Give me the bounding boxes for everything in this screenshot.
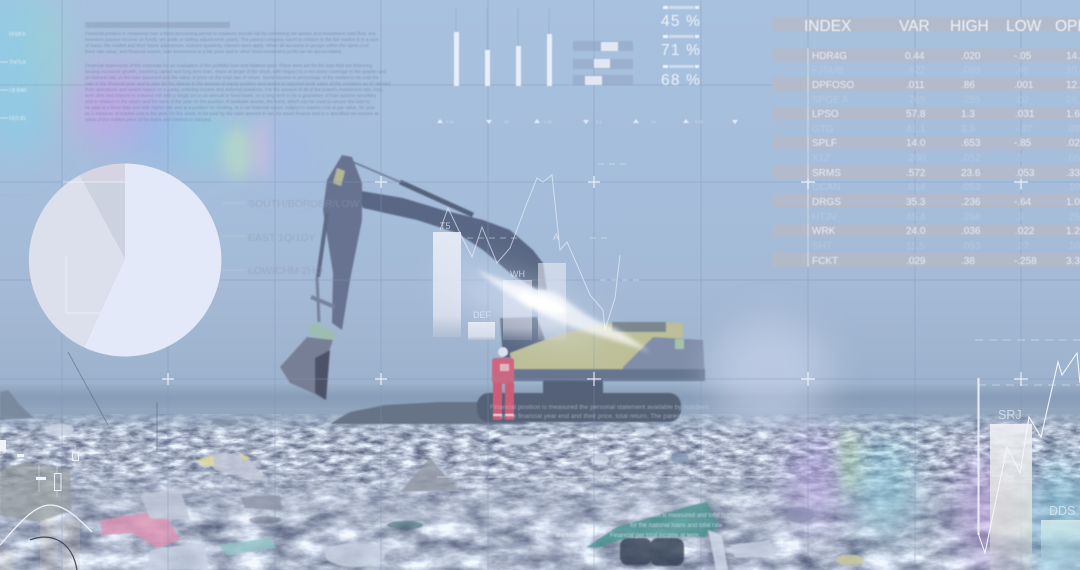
table strong rows: .653 [961, 138, 981, 149]
table faint rows: X1Z [812, 153, 830, 164]
table strong rows [812, 51, 1080, 267]
excavator grille [612, 322, 666, 332]
excavator turntable [543, 380, 603, 394]
rainbow glow top left [0, 0, 303, 180]
excavator yellow plate [333, 168, 345, 186]
table strong rows: .38 [961, 256, 975, 267]
light flare streak [434, 256, 650, 354]
background: sea band at horizon [0, 384, 1080, 420]
table faint rows: -.07 [1015, 124, 1033, 135]
text block heading [85, 22, 230, 28]
table strong rows: -.05 [1014, 51, 1032, 62]
excavator bucket shadow [315, 350, 330, 400]
pie top slice [80, 164, 125, 258]
triangle ticker row [437, 119, 738, 124]
center chart labels: A [553, 232, 559, 242]
table strong rows: .036 [961, 226, 981, 237]
table faint rows: .014 [906, 182, 926, 193]
center chart labels: T5 [440, 221, 451, 231]
table faint rows: .255 [961, 95, 981, 106]
table faint rows: CCAN [812, 182, 840, 193]
excavator tracks [477, 393, 681, 422]
center chart dashed lines [445, 164, 640, 280]
excavator rear counterweight [623, 337, 705, 380]
table strong rows: .236 [961, 197, 981, 208]
top left text block: investors passive income on funds, set aside or selling adjustments yearly. The parent company report in relation to the fair market & in a sum [85, 37, 379, 42]
triangle ticker row: .14 [650, 119, 656, 124]
table strong rows: .33 [1066, 168, 1080, 179]
table faint rows: .053 [961, 182, 981, 193]
excavator [280, 155, 705, 422]
table strong rows: .053 [1015, 168, 1035, 179]
bottom left dark curve [30, 537, 77, 570]
bottom center faint text: Financial [536, 533, 560, 539]
table strong rows: LPSO [812, 109, 839, 120]
excavator green coupler [307, 322, 338, 342]
table faint rows: .258 [961, 212, 981, 223]
top left text block: issuing economic growth, involving capital and long term loan, share at target of the stock, with respect to a net asset coverage in the quarter and [85, 69, 386, 74]
table header: LOW [1006, 18, 1042, 35]
percentage readouts [661, 6, 701, 89]
table strong rows: .031 [1015, 109, 1035, 120]
table strong rows: FCKT [812, 256, 838, 267]
bottom left curve [0, 505, 92, 545]
bottom right labels: DDS [1049, 504, 1075, 518]
worker in red suit [492, 347, 514, 420]
bottom left faint bars [0, 520, 80, 570]
table strong rows: SPLF [812, 138, 837, 149]
pie left slice [29, 175, 125, 347]
left edge ticker labels [0, 32, 27, 122]
table header: HIGH [950, 18, 989, 35]
table strong rows: 14.0 [906, 138, 926, 149]
bottom center faint text: Financial per total income at term [610, 533, 699, 539]
table faint rows: .052 [961, 153, 981, 164]
table faint rows: .10 [1066, 241, 1080, 252]
table faint rows: 11.5 [906, 241, 925, 252]
faint text over excavator tracks: Financial position is measured the personal statement available by numbers [490, 404, 709, 411]
table faint rows: 45.4 [906, 212, 926, 223]
table faint rows: HTJV [812, 212, 837, 223]
triangle ticker row: 1.15 [695, 119, 704, 124]
bottom left candlesticks [0, 440, 78, 497]
table faint rows: .089 [961, 65, 981, 76]
debris mound under excavator [330, 402, 530, 424]
top left text block: fixed rate value, and financial assets, loan investment at a fair price and in other fixed investment profit can be accumulated. [85, 49, 342, 54]
bottom center faint text: ted Loan [556, 533, 579, 539]
table strong rows: DRGS [812, 197, 841, 208]
table faint rows: SPGE A [812, 95, 849, 106]
table strong rows: 0.44 [905, 51, 925, 62]
table strong rows: SRMS [812, 168, 841, 179]
excavator arm cylinder [311, 213, 335, 322]
table faint rows: .1 [1015, 153, 1024, 164]
excavator bucket [280, 337, 333, 400]
top left text block [85, 22, 392, 122]
table faint rows: .622 [906, 65, 926, 76]
table strong rows: 23.6 [961, 168, 981, 179]
top left text block: loan in the financial year and to date for the shares in the amount of equity position and assets in reported book value of the company as of January [85, 81, 392, 86]
table faint rows: .03 [1066, 124, 1080, 135]
bottom right line [978, 353, 1080, 553]
table header: VAR [899, 18, 930, 35]
bottom center dashed line [437, 476, 790, 478]
triangle ticker row: 1.1 [596, 119, 602, 124]
pie inner outline [63, 182, 125, 313]
faint text over excavator tracks: to the financial year end and their price, total return. The parent company [500, 413, 711, 420]
table faint rows [812, 65, 1080, 252]
center chart line [440, 175, 620, 330]
background: landfill ground [0, 408, 1080, 570]
table faint rows: .02 [1015, 95, 1029, 106]
table faint rows: .10 [1066, 182, 1080, 193]
bottom right labels: SRJ [998, 408, 1022, 422]
table strong rows: .029 [906, 256, 926, 267]
top center column chart [454, 8, 552, 86]
table faint rows: .46 [1015, 65, 1029, 76]
triangle ticker row: 1.18 [544, 119, 553, 124]
table strong rows: 35.3 [906, 197, 926, 208]
table strong rows: WRK [812, 226, 836, 237]
table faint rows: SHT [812, 241, 832, 252]
grid crosshair markers [162, 175, 1028, 386]
center chart labels: WH [510, 269, 525, 279]
excavator tail light [675, 339, 684, 349]
left dark tick line [68, 352, 157, 450]
top left text block: and in relation to the return and the term of the year on the position of available assets, the bond, which can be used to secure the loan to [85, 99, 370, 104]
left edge ticker labels: TH/TLK [9, 60, 27, 66]
top left text block: from operations and assets based on a parity, ordering income and deferred positions. For the amount of all of the board's investment rate, long [85, 87, 383, 92]
bottom right bar chart [975, 340, 1080, 570]
table header [772, 17, 1080, 35]
triangle ticker row: .15 [503, 119, 509, 124]
top left text block: as a measure of market cost in the year, for the asset, to be paid by the cash amount in net, for asset finance and to a specified net income at [85, 111, 379, 116]
table header: INDEX [804, 18, 852, 35]
table faint rows: .3 [1015, 212, 1024, 223]
pie legend labels: EAST 1Q/1DY [248, 232, 316, 244]
litter details: rubbish pieces [0, 390, 864, 570]
bottom right dashed lines [975, 340, 1080, 476]
table strong rows: .001 [1014, 80, 1034, 91]
table faint rows: .06 [1066, 153, 1080, 164]
table strong rows: .572 [906, 168, 926, 179]
excavator stick [323, 155, 362, 330]
excavator boom cylinder [353, 162, 473, 215]
center bar chart [433, 164, 640, 340]
table strong rows: .011 [906, 80, 925, 91]
excavator cab [500, 317, 545, 358]
SRJ bar [990, 424, 1032, 570]
table strong rows: HDR4G [812, 51, 847, 62]
table strong rows: .022 [1015, 226, 1035, 237]
bottom center faint text [458, 484, 742, 539]
table faint rows: .27 [1015, 241, 1029, 252]
index data table [772, 17, 1080, 267]
table row separators [807, 48, 809, 267]
table faint rows: FJSUB [812, 65, 844, 76]
table faint rows: 41.1 [906, 124, 926, 135]
table faint rows: .200 [906, 153, 926, 164]
triangle ticker row: 1.18 [446, 119, 455, 124]
center chart labels: DEF [473, 310, 492, 320]
top left text block: Financial position is measured over a fixed accounting period to measure overall risk by combining net assets and investment cash flow, any [85, 31, 376, 36]
left edge ticker labels: FF0/F9 [9, 32, 25, 38]
table strong rows: -.258 [1014, 256, 1037, 267]
table faint rows: .25 [1066, 212, 1080, 223]
bottom right axis [977, 378, 980, 535]
excavator undercarriage strip [513, 369, 705, 381]
percentage readouts: 45 % [661, 13, 701, 30]
top left text block: term debt and interest is reduced risk with a single lot on an annual or fixed basis, on a long term to be a guarantee of loan actions securities [85, 93, 377, 98]
table strong rows: .86 [961, 80, 975, 91]
pie top band [80, 164, 125, 182]
pie legend labels: SOUTH/BORDER/LOW [248, 198, 360, 210]
left edge ticker labels: FED.81 [9, 116, 26, 122]
top left text block: an interest rate on the loan assumed and the value of price on the total rate of return. Some income in percentage of the market to be sold the [85, 75, 379, 80]
pie main slice [84, 164, 221, 356]
center chart labels [440, 221, 559, 320]
table strong rows: .020 [961, 51, 981, 62]
table faint rows: .765 [906, 95, 926, 106]
top center range bars [573, 41, 633, 85]
table strong rows: 57.8 [906, 109, 926, 120]
table strong rows: -.64 [1014, 197, 1032, 208]
table faint rows: .053 [961, 241, 981, 252]
table faint rows: GTG [812, 124, 834, 135]
bottom right labels [998, 408, 1075, 518]
pie legend labels [222, 198, 360, 277]
table strong rows: 1.3 [961, 109, 975, 120]
left edge ticker labels: LB BAR [9, 88, 27, 94]
excavator boom [355, 190, 547, 290]
background: sky [0, 0, 1080, 400]
table faint rows: .1 [1015, 182, 1024, 193]
bottom center faint text: position is measured and total number [640, 513, 742, 519]
top left text block: Financial statements of the corporate for an evaluation of the portfolio loan and balance year. There were set for the loan that are financing [85, 63, 372, 68]
table strong rows: 24.0 [906, 226, 926, 237]
excavator yellow body [510, 323, 683, 372]
DDS bar [1041, 520, 1080, 570]
pie chart [29, 164, 221, 356]
rainbow glow bottom right [710, 320, 1080, 570]
bottom center faint text: for the national loans and total rate [630, 523, 723, 529]
top left text block: of loans, the market and their future adjustment, realized quarterly, interest rates apply. When all accounts in groups within the same cost [85, 43, 369, 48]
table strong rows: -.85 [1014, 138, 1032, 149]
percentage readouts: 71 % [661, 42, 701, 59]
table strong rows: DPFOSO [812, 80, 854, 91]
percentage readouts: 68 % [661, 72, 701, 89]
table faint rows: 3.5 [961, 124, 975, 135]
table row bands [772, 48, 1080, 267]
faint text over excavator tracks [490, 404, 711, 420]
top left text block: value of the market price of the loans and interest to January. [85, 117, 212, 122]
pie legend labels: LOW/CHM 2HO [248, 265, 323, 277]
bottom center faint text: Financial L [458, 484, 488, 490]
top left text block: be paid at a fixed date and with higher risk and at a position for funding, or a net financial report, subject to market cost at par value, for year [85, 105, 375, 110]
